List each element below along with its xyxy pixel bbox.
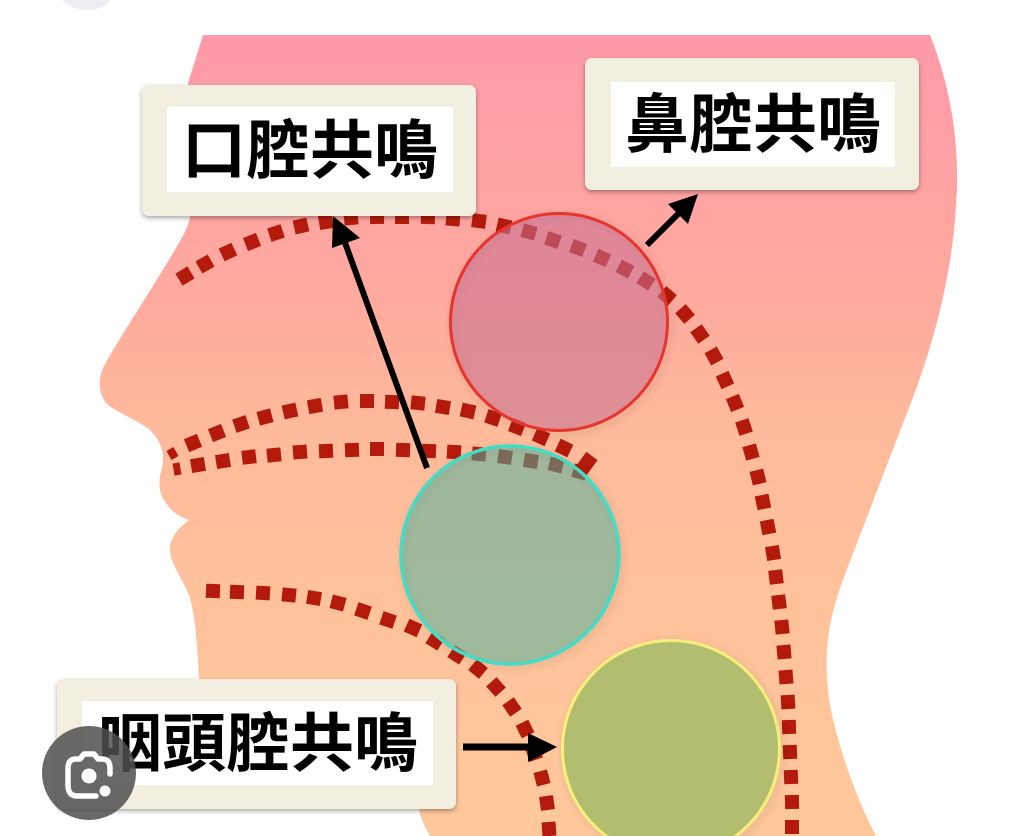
circle: pharyngeal resonance — [562, 640, 782, 836]
top partial grey circle — [51, 0, 123, 10]
circle: nasal resonance — [450, 214, 670, 434]
label: pharyngeal resonance — [57, 679, 456, 809]
dotted line: upper nasal passage — [170, 401, 592, 471]
arrow: to oral label — [332, 216, 427, 468]
icon: image search lens button — [42, 726, 136, 820]
arrow: to pharyngeal circle — [463, 733, 557, 762]
dotted line: pharynx arc — [213, 591, 549, 829]
circle: oral resonance — [401, 446, 621, 667]
arrow: to nasal label — [647, 194, 698, 245]
label: pharyngeal resonance: 咽頭腔共鳴 — [98, 708, 418, 780]
label: nasal resonance — [585, 58, 919, 190]
label: nasal resonance: 鼻腔共鳴 — [625, 89, 881, 161]
label: oral resonance: 口腔共鳴 — [182, 115, 438, 187]
dotted line: vocal tract top arc — [185, 217, 792, 827]
label: oral resonance — [142, 85, 476, 216]
dotted line: lower oral passage — [176, 449, 580, 475]
